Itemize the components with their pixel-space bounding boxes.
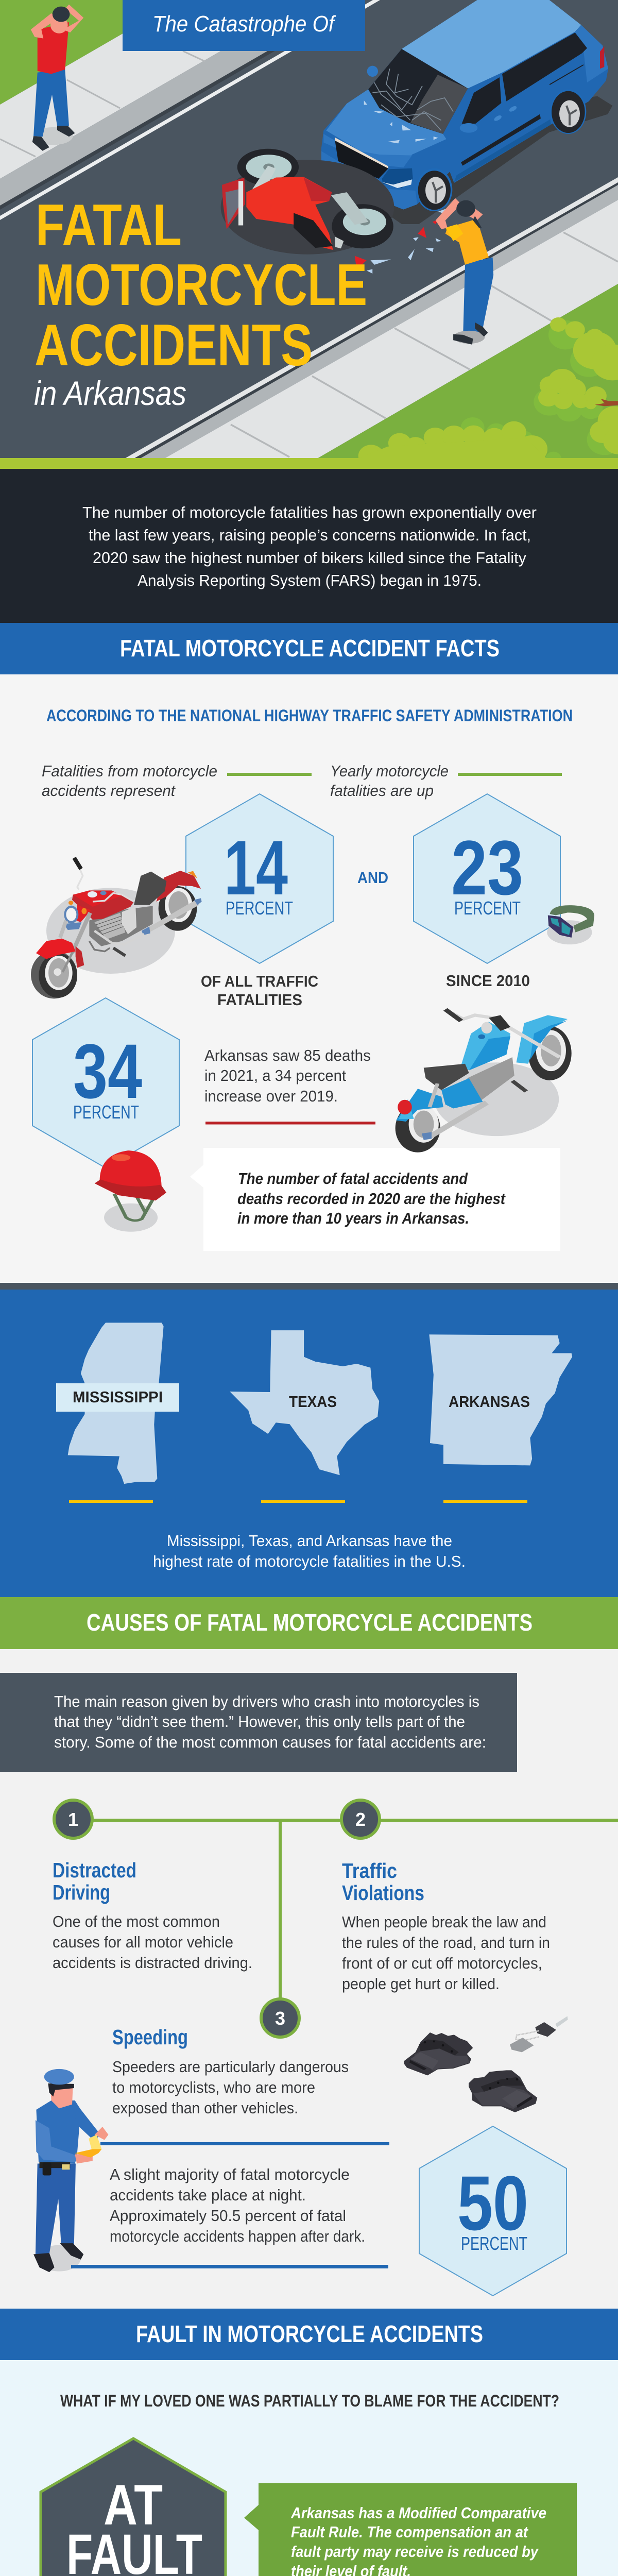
illustration: bystander in yellow shirt — [436, 198, 493, 345]
icon: red helmet — [95, 1150, 166, 1232]
text: highest rate: highest rate of motorcycle fatalities in the U.S. — [153, 1552, 466, 1570]
text: highest rate — [153, 1532, 466, 1570]
stat hexagon: 14 percent: 14 — [224, 824, 288, 911]
text: night accidents: A slight majority of fatal motorcycle — [110, 2165, 350, 2183]
block: speeding — [112, 2025, 349, 2117]
stat hexagon: 34 percent — [32, 998, 179, 1168]
label: since 2010: SINCE 2010 — [446, 972, 530, 990]
stat hexagon: 23 percent — [414, 794, 560, 963]
stat hexagon: 23 percent: 23 — [451, 824, 523, 911]
banner: the catastrophe of: The Catastrophe Of — [152, 11, 336, 37]
callout: highest in 10 years: in more than 10 years in Arkansas. — [237, 1209, 469, 1227]
panel: states with highest rate — [0, 1283, 618, 1597]
block: distracted driving: causes for all motor vehicle — [53, 1933, 233, 1951]
text: night accidents — [110, 2165, 365, 2245]
text: yearly fatalities up: fatalities are up — [330, 782, 434, 800]
panel: intro text: Analysis Reporting System (FARS) began in 1975. — [138, 571, 482, 589]
panel: causes header — [0, 1597, 618, 1649]
text: night accidents: Approximately 50.5 percent of fatal — [110, 2207, 346, 2225]
map: Arkansas — [429, 1334, 572, 1465]
banner: the catastrophe of — [123, 0, 365, 51]
block: traffic violations — [342, 1859, 550, 1993]
block: traffic violations: front of or cut off motorcycles, — [342, 1954, 542, 1972]
block: distracted driving: Distracted — [53, 1858, 136, 1882]
callout: highest in 10 years — [190, 1148, 560, 1251]
label: of all traffic fatalities: OF ALL TRAFFIC — [201, 972, 318, 990]
callout: didn't see them: story. Some of the most common causes for fatal accidents are: — [54, 1733, 486, 1751]
text: fatalities represent: Fatalities from motorcycle — [42, 762, 217, 780]
callout: modified comparative fault rule: Arkansas has a Modified Comparative — [290, 2504, 546, 2522]
text: night accidents: motorcycle accidents happen after dark. — [110, 2227, 365, 2245]
text: Arkansas 85 deaths: Arkansas saw 85 deaths — [204, 1046, 371, 1064]
block: speeding: to motorcyclists, who are more — [112, 2078, 315, 2096]
text: fatalities represent: accidents represent — [42, 782, 176, 800]
block: distracted driving: Driving — [53, 1880, 110, 1904]
label: and: AND — [357, 869, 388, 887]
badge: 1 — [54, 1800, 92, 1838]
text: Arkansas 85 deaths — [204, 1046, 375, 1124]
panel: intro text: the last few years, raising people’s concerns nationwide. In fact, — [89, 526, 531, 544]
panel: facts header — [0, 623, 618, 674]
block: distracted driving: accidents is distracted driving. — [53, 1954, 252, 1972]
panel: facts header: FATAL MOTORCYCLE ACCIDENT FACTS — [120, 635, 500, 662]
block: speeding: exposed than other vehicles. — [112, 2099, 298, 2117]
block: traffic violations: the rules of the road, and turn in — [342, 1934, 550, 1952]
text: fatalities represent — [42, 762, 312, 800]
stat hexagon: 14 percent — [186, 794, 333, 963]
label: Mississippi — [56, 1383, 179, 1412]
callout: didn't see them: that they “didn’t see them.” However, this only tells part of the — [54, 1713, 465, 1731]
callout: modified comparative fault rule: fault party may receive is reduced by — [291, 2543, 539, 2561]
icon: red motorcycle — [31, 858, 202, 998]
panel: motorcycle facts — [0, 674, 618, 1283]
callout: didn't see them — [0, 1673, 517, 1772]
hexagon: at fault insurance systems — [41, 2438, 226, 2576]
stat hexagon: 34 percent: 34 — [73, 1028, 142, 1114]
block: distracted driving — [53, 1858, 252, 1972]
text: yearly fatalities up — [330, 762, 562, 800]
panel: fault — [0, 2360, 618, 2576]
text: Arkansas 85 deaths: in 2021, a 34 percent — [204, 1066, 346, 1084]
stat hexagon: 34 percent: PERCENT — [73, 1101, 139, 1123]
icon: blue motorcycle — [396, 1009, 572, 1153]
label: of all traffic fatalities — [201, 972, 318, 1009]
stat hexagon: 23 percent: PERCENT — [454, 897, 521, 919]
panel: intro text: The number of motorcycle fatalities has grown exponentially over — [82, 503, 537, 521]
block: distracted driving: One of the most common — [53, 1912, 220, 1930]
icon: gloves and keys — [404, 2016, 568, 2112]
illustration: isometric street — [0, 0, 618, 467]
panel: causes header: CAUSES OF FATAL MOTORCYCLE ACCIDENTS — [87, 1609, 533, 1636]
label: of all traffic fatalities: FATALITIES — [217, 991, 302, 1009]
block: traffic violations: Traffic — [342, 1859, 397, 1883]
icon: goggles — [547, 905, 594, 944]
map: Texas — [230, 1330, 379, 1475]
panel: intro text — [0, 469, 618, 623]
label: Texas: TEXAS — [289, 1393, 337, 1411]
panel: causes — [0, 1649, 618, 2309]
panel: fault header — [0, 2309, 618, 2360]
illustration: police officer — [33, 2069, 108, 2272]
map: Mississippi — [68, 1323, 164, 1484]
text: highest rate: Mississippi, Texas, and Arkansas have the — [167, 1532, 452, 1550]
panel: fault header: FAULT IN MOTORCYCLE ACCIDENTS — [136, 2320, 483, 2347]
badge: 2 — [341, 1800, 380, 1838]
stat hexagon: 50 percent: 50 — [457, 2160, 528, 2246]
illustration: bystander in red shirt — [31, 5, 83, 151]
illustration: crashed blue minivan — [321, 0, 612, 224]
title: fatal motorcycle accidents in Arkansas: FATAL — [36, 193, 182, 258]
label: Mississippi: MISSISSIPPI — [73, 1388, 163, 1406]
title: fatal motorcycle accidents in Arkansas — [34, 193, 367, 412]
label: Arkansas: ARKANSAS — [449, 1393, 530, 1411]
callout: modified comparative fault rule: Fault Rule. The compensation an at — [291, 2523, 528, 2541]
hero: road accident scene with title — [0, 0, 618, 469]
block: traffic violations: When people break the law and — [342, 1913, 546, 1931]
stat hexagon: 50 percent: PERCENT — [461, 2233, 527, 2254]
panel: intro text: 2020 saw the highest number of bikers killed since the Fatality — [93, 549, 526, 567]
text: Arkansas 85 deaths: increase over 2019. — [204, 1087, 338, 1105]
text: night accidents: accidents take place at night. — [110, 2186, 306, 2204]
title: fatal motorcycle accidents in Arkansas: in Arkansas — [34, 374, 186, 412]
hexagon: at fault insurance systems: AT — [104, 2473, 163, 2537]
block: speeding: Speeding — [112, 2025, 188, 2049]
badge: 1: 1 — [68, 1809, 78, 1830]
illustration: crashed red motorcycle — [221, 149, 449, 274]
callout: didn't see them: The main reason given by drivers who crash into motorcycles is — [54, 1692, 479, 1710]
text: yearly fatalities up: Yearly motorcycle — [330, 762, 449, 780]
block: traffic violations: Violations — [342, 1881, 424, 1905]
block: traffic violations: people get hurt or killed. — [342, 1975, 500, 1993]
callout: modified comparative fault rule — [244, 2483, 577, 2576]
badge: 2: 2 — [355, 1809, 366, 1830]
block: speeding: Speeders are particularly dangerous — [112, 2058, 349, 2076]
title: fatal motorcycle accidents in Arkansas: ACCIDENTS — [35, 313, 313, 378]
badge: 3 — [261, 1999, 299, 2037]
stat hexagon: 50 percent — [419, 2126, 566, 2296]
callout: highest in 10 years: deaths recorded in 2020 are the highest — [237, 1190, 506, 1208]
badge: 3: 3 — [275, 2008, 285, 2029]
stat hexagon: 14 percent: PERCENT — [226, 897, 293, 919]
title: fatal motorcycle accidents in Arkansas: MOTORCYCLE — [36, 252, 367, 318]
callout: highest in 10 years: The number of fatal accidents and — [238, 1170, 468, 1188]
